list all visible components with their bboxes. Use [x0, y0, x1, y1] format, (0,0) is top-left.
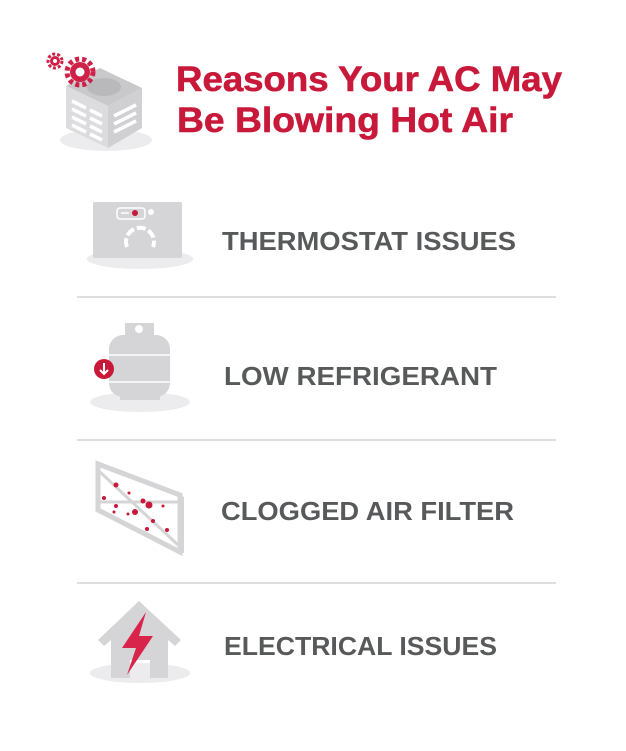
icon: thermostat [87, 202, 193, 269]
label: electrical issues: ELECTRICAL ISSUES [224, 631, 497, 661]
label: clogged air filter: CLOGGED AIR FILTER [221, 496, 514, 526]
label: low refrigerant: LOW REFRIGERANT [224, 361, 497, 391]
title: Reasons Your AC May [176, 60, 563, 99]
icon: clogged filter [98, 464, 184, 553]
title: Be Blowing Hot Air [177, 101, 513, 140]
icon: refrigerant tank [90, 323, 190, 412]
icon: house with lightning [90, 601, 190, 683]
icon: AC unit with gears [48, 54, 152, 151]
label: thermostat issues: THERMOSTAT ISSUES [222, 226, 516, 256]
title [176, 60, 563, 140]
